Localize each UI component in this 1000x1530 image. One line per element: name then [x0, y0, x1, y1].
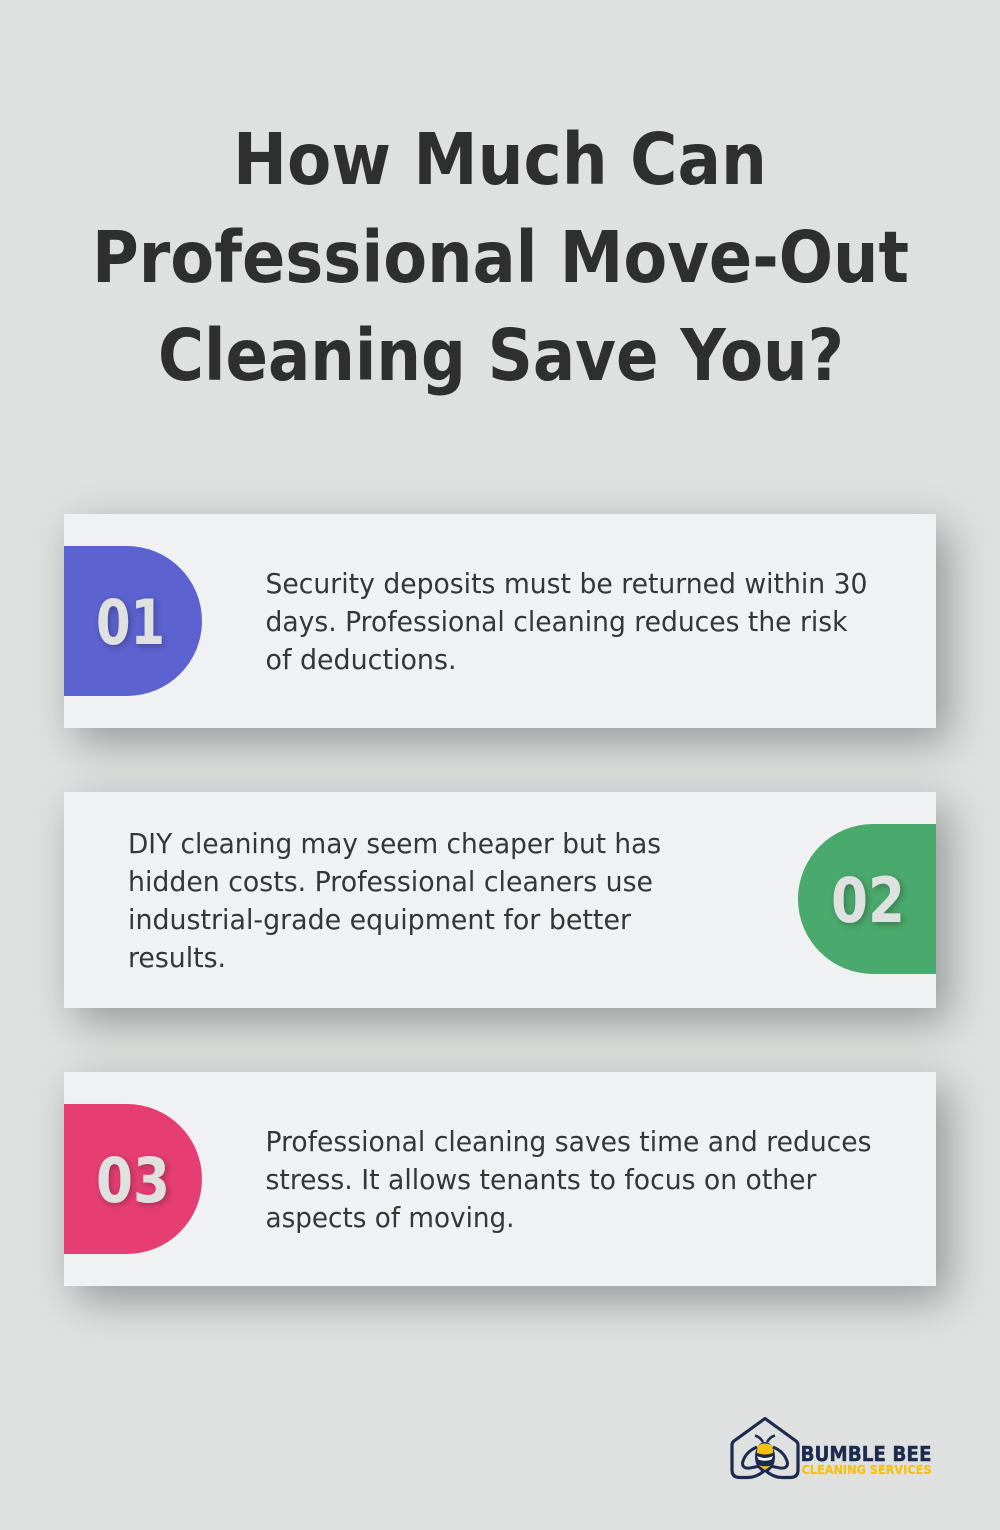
number 01: 01	[96, 586, 165, 659]
title: Professional Move-Out	[92, 216, 909, 299]
title	[92, 118, 909, 397]
number 03: 03	[96, 1144, 170, 1217]
logo tagline: CLEANING SERVICES	[802, 1463, 932, 1477]
text 01	[266, 567, 868, 676]
badge 03	[64, 1104, 202, 1254]
text 03	[266, 1125, 872, 1234]
badge 02	[798, 824, 936, 974]
text 03: aspects of moving.	[266, 1201, 514, 1234]
text 02: industrial-grade equipment for better	[128, 903, 631, 936]
text 01: days. Professional cleaning reduces the risk	[266, 605, 848, 638]
panel: card 02	[64, 792, 936, 1008]
text 02: results.	[128, 941, 226, 974]
text 02	[128, 827, 661, 974]
number 02: 02	[831, 864, 905, 937]
panel: card 01	[64, 514, 936, 728]
text 01: of deductions.	[266, 643, 456, 676]
icon: house outline	[732, 1418, 798, 1478]
logo wordmark: BUMBLE BEE	[800, 1442, 932, 1466]
panel: card 03	[64, 1072, 936, 1286]
icon: bee	[742, 1436, 788, 1472]
title: How Much Can	[233, 118, 767, 201]
badge 01	[64, 546, 202, 696]
text 02: DIY cleaning may seem cheaper but has	[128, 827, 661, 860]
text 01: Security deposits must be returned within 30	[266, 567, 868, 600]
title: Cleaning Save You?	[158, 314, 844, 397]
text 03: Professional cleaning saves time and reduces	[266, 1125, 872, 1158]
logo: Bumble Bee Cleaning Services	[732, 1418, 932, 1478]
text 02: hidden costs. Professional cleaners use	[128, 865, 653, 898]
text 03: stress. It allows tenants to focus on other	[266, 1163, 817, 1196]
